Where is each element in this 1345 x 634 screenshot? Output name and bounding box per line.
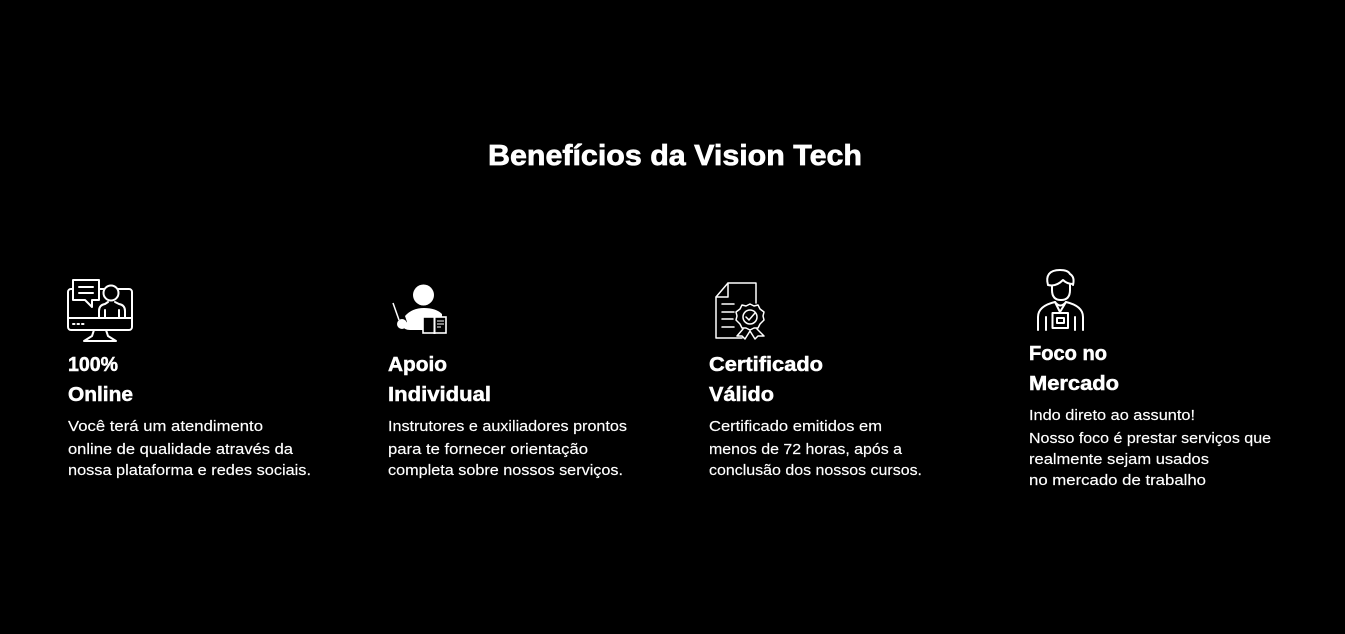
panel: Apoio Individual (388, 284, 627, 479)
text block: online description: online de qualidade através da (68, 442, 294, 458)
text block: support description: Instrutores e auxiliadores prontos (388, 419, 627, 435)
heading: 100% Online: Online (68, 384, 133, 406)
text block: online description: Você terá um atendimento (68, 419, 263, 435)
heading: Foco no Mercado (1029, 343, 1119, 395)
text block: support description: para te fornecer orientação (388, 442, 588, 458)
heading: Apoio Individual: Apoio (388, 354, 447, 376)
text block: market focus description: realmente sejam usados (1029, 452, 1209, 468)
heading: Foco no Mercado: Mercado (1029, 373, 1119, 395)
heading: Certificado Válido (709, 354, 823, 406)
icon: monitor with online instructor (68, 280, 132, 341)
text block: market focus description (1029, 408, 1271, 489)
icon: certificate document with seal (716, 283, 764, 339)
text block: market focus description: no mercado de trabalho (1029, 473, 1206, 489)
heading: Apoio Individual: Individual (388, 384, 491, 406)
text block: certificate description: conclusão dos nossos cursos. (709, 463, 922, 479)
heading: Foco no Mercado: Foco no (1029, 343, 1107, 365)
text block: online description: nossa plataforma e redes sociais. (68, 463, 311, 479)
heading: 100% Online: 100% (68, 354, 118, 376)
text block: support description: completa sobre nossos serviços. (388, 463, 623, 479)
panel: Certificado Válido (709, 283, 922, 479)
heading: Apoio Individual (388, 354, 491, 406)
icon: instructor with pointer and book (393, 284, 446, 334)
text block: certificate description (709, 419, 922, 479)
icon: professional with badge (1038, 270, 1083, 330)
text block: market focus description: Nosso foco é prestar serviços que (1029, 431, 1271, 447)
heading: 100% Online (68, 354, 133, 406)
text block: online description (68, 419, 311, 479)
text block: support description (388, 419, 627, 479)
panel: Foco no Mercado (1029, 270, 1271, 489)
text block: certificate description: Certificado emitidos em (709, 419, 882, 435)
heading: Certificado Válido: Certificado (709, 354, 823, 376)
panel: 100% Online (68, 280, 311, 479)
text block: market focus description: Indo direto ao assunto! (1029, 408, 1195, 424)
text block: certificate description: menos de 72 horas, após a (709, 442, 903, 458)
heading: Certificado Válido: Válido (709, 384, 774, 406)
title: Benefícios da Vision Tech (488, 140, 862, 172)
